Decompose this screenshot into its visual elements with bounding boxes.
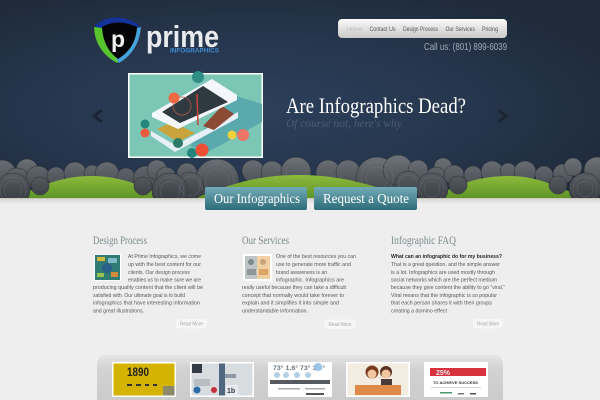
body text: and great illustrations. bbox=[93, 308, 144, 314]
body text: infographic. Infographics are bbox=[276, 278, 344, 284]
answer text: That is a great question, and the simple answer bbox=[391, 262, 500, 268]
arrow: next slide bbox=[498, 110, 506, 122]
button: our infographics bbox=[205, 187, 307, 210]
body text: At Prime Infographics, we come bbox=[128, 254, 201, 260]
body text: use to generate more traffic and bbox=[276, 262, 351, 268]
answer text: Viral means that the infographic is so popular bbox=[391, 293, 497, 299]
body text bbox=[93, 254, 203, 314]
navigation bar: Design Process bbox=[403, 27, 438, 33]
answer text bbox=[391, 262, 505, 314]
arrow: previous slide bbox=[94, 110, 102, 122]
tagline: INFOGRAPHICS bbox=[170, 48, 220, 54]
read more button: Read More bbox=[477, 322, 499, 328]
back clouds bbox=[0, 154, 600, 196]
panel: our services bbox=[242, 235, 356, 329]
answer text: social networks which are the perfect medium bbox=[391, 278, 497, 284]
slide image: isometric phone bbox=[128, 71, 263, 158]
answer text: creating a domino effect bbox=[391, 308, 447, 314]
body text: infographics that have interesting information bbox=[93, 300, 200, 306]
body text bbox=[242, 254, 356, 314]
thumbnail: achieve success: TO ACHIEVE SUCCESS bbox=[433, 381, 479, 385]
body text: producing quality content that the client will be bbox=[93, 285, 203, 291]
phone number: Call us: (801) 899-6039 bbox=[424, 42, 507, 53]
thumbnail: blue-gray stats: 1b bbox=[227, 388, 235, 395]
thumbnail: temperature data: 73° 1.6° 73° 1.6° bbox=[273, 366, 326, 372]
hero background bbox=[0, 0, 600, 198]
navigation bar: Home bbox=[347, 27, 363, 33]
landscape: clouds and hills bbox=[0, 154, 600, 198]
thumbnail: achieve success: 25% bbox=[436, 370, 451, 377]
slide headline: Are Infographics Dead? bbox=[286, 93, 466, 118]
slide subheading: Of course not, here's why. bbox=[286, 118, 404, 130]
body text: concept that normally would take forever to bbox=[242, 293, 344, 299]
body text: brand awareness is an bbox=[276, 270, 327, 276]
button: request a quote: Request a Quote bbox=[323, 192, 409, 207]
heading: Design Process bbox=[93, 235, 147, 247]
body text: really useful because they can take a difficult bbox=[242, 285, 346, 291]
logo bbox=[94, 18, 220, 63]
panel: infographic faq bbox=[391, 235, 505, 328]
heading: Our Services bbox=[242, 235, 289, 247]
body text: understandable information. bbox=[242, 308, 308, 314]
hills bbox=[28, 176, 154, 198]
thumbnail: blue-gray stats bbox=[190, 362, 254, 397]
wordmark: prime bbox=[146, 19, 219, 54]
panel: design process bbox=[93, 235, 207, 328]
body text: clients. Our design process bbox=[128, 270, 190, 276]
panel: infographic carousel bbox=[97, 355, 503, 400]
answer text: because they give content the ability to go “viral.” bbox=[391, 285, 505, 291]
thumbnail bbox=[243, 254, 272, 281]
navigation bar: Our Services bbox=[446, 27, 475, 33]
front clouds bbox=[0, 170, 600, 198]
body text: up with the best content for our bbox=[128, 262, 201, 268]
thumbnail bbox=[94, 254, 121, 281]
thumbnail: temperature data bbox=[268, 362, 332, 397]
navigation bar: Pricing bbox=[482, 27, 498, 33]
body text: enables us to make sure we are bbox=[128, 278, 201, 284]
cloud rings bbox=[0, 162, 598, 198]
read more button: Read More bbox=[328, 322, 352, 328]
navigation bar: Contact Us bbox=[370, 27, 396, 33]
body text: satisfied with. Our ultimate goal is to build bbox=[93, 293, 185, 299]
read more button: Read More bbox=[180, 322, 203, 328]
body text: One of the best resources you can bbox=[276, 254, 356, 260]
answer text: is a lot. Infographics are used mostly through bbox=[391, 270, 495, 276]
icon: shield: p bbox=[111, 26, 125, 52]
content background edge bbox=[0, 198, 600, 199]
button: our infographics: Our Infographics bbox=[214, 192, 300, 207]
navigation bar bbox=[338, 19, 507, 38]
button: request a quote bbox=[314, 187, 417, 210]
heading: Infographic FAQ bbox=[391, 235, 457, 247]
thumbnail: 1890 bbox=[112, 362, 176, 397]
thumbnail: 1890: 1890 bbox=[127, 365, 149, 379]
thumbnail: couple illustration bbox=[346, 362, 410, 397]
question: What can an infographic do for my business? bbox=[391, 254, 502, 260]
body text: explain and it simplifies it into simple and bbox=[242, 300, 339, 306]
answer text: that each person shares it with their groups bbox=[391, 300, 492, 306]
thumbnail: achieve success bbox=[424, 362, 488, 397]
